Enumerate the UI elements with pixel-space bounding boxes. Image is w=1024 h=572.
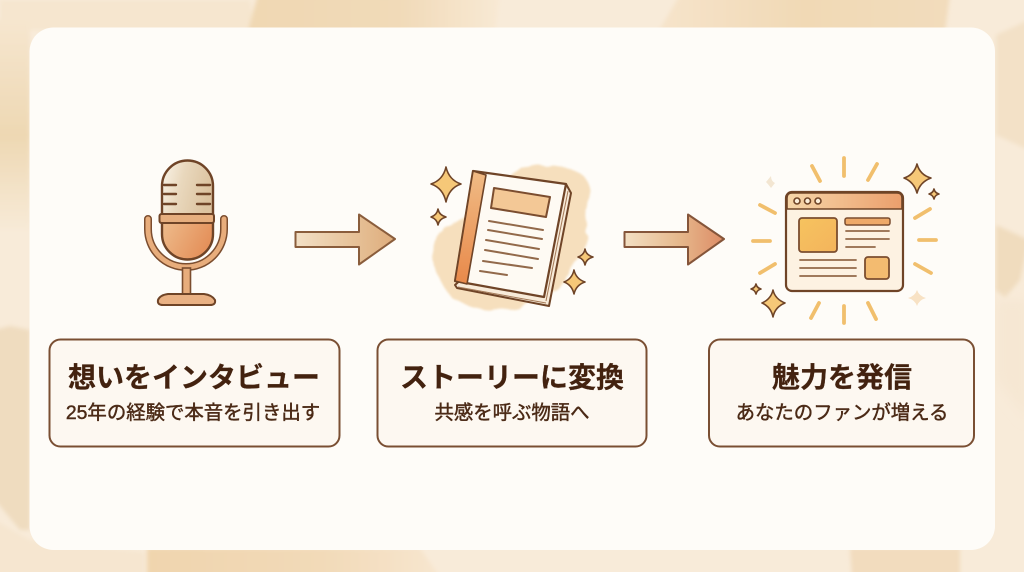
text: step three description: あなたのファンが増える xyxy=(736,402,948,424)
rays xyxy=(753,158,936,323)
panel: step one label xyxy=(50,340,340,446)
arrow: step two to three xyxy=(624,214,724,264)
panel: step two label xyxy=(378,340,646,446)
sparkles around window xyxy=(751,164,939,317)
text: step two description: 共感を呼ぶ物語へ xyxy=(434,402,590,424)
arrow: step one to two xyxy=(296,214,395,264)
browser window xyxy=(786,192,903,291)
icon: website window with rays xyxy=(751,158,939,323)
panel: step three label xyxy=(709,340,974,446)
icon: microphone xyxy=(148,160,224,305)
icon: book xyxy=(431,165,593,310)
heading: step three: 魅力を発信 xyxy=(772,362,912,393)
sparkles around book xyxy=(431,167,593,294)
text: step one description: 25年の経験で本音を引き出す xyxy=(66,402,320,424)
heading: step one: 想いをインタビュー xyxy=(68,362,320,393)
watercolor blob behind book xyxy=(434,165,592,310)
heading: step two: ストーリーに変換 xyxy=(400,362,624,393)
